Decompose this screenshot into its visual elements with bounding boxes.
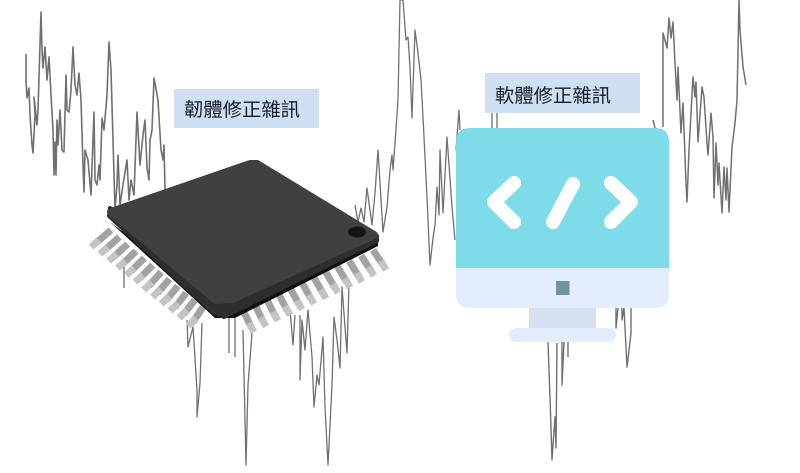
label: software noise correction	[485, 73, 640, 113]
power button	[556, 281, 570, 295]
label: software noise correction: 軟體修正雜訊	[495, 85, 611, 107]
monitor stand	[529, 306, 596, 330]
label: firmware noise correction	[174, 89, 319, 128]
monitor screen	[456, 128, 669, 268]
icon: monitor with code	[456, 128, 669, 342]
chip underside shadow	[110, 222, 378, 318]
lower-left pins	[91, 230, 203, 326]
monitor base	[509, 328, 616, 342]
icon: microchip	[91, 164, 386, 332]
code symbol	[494, 183, 631, 222]
chip marker hole	[348, 226, 366, 238]
chip body top	[111, 164, 374, 300]
monitor bezel	[456, 260, 669, 308]
chip body side	[109, 208, 377, 317]
lower-right pins	[243, 250, 386, 332]
label: firmware noise correction: 韌體修正雜訊	[184, 99, 300, 121]
